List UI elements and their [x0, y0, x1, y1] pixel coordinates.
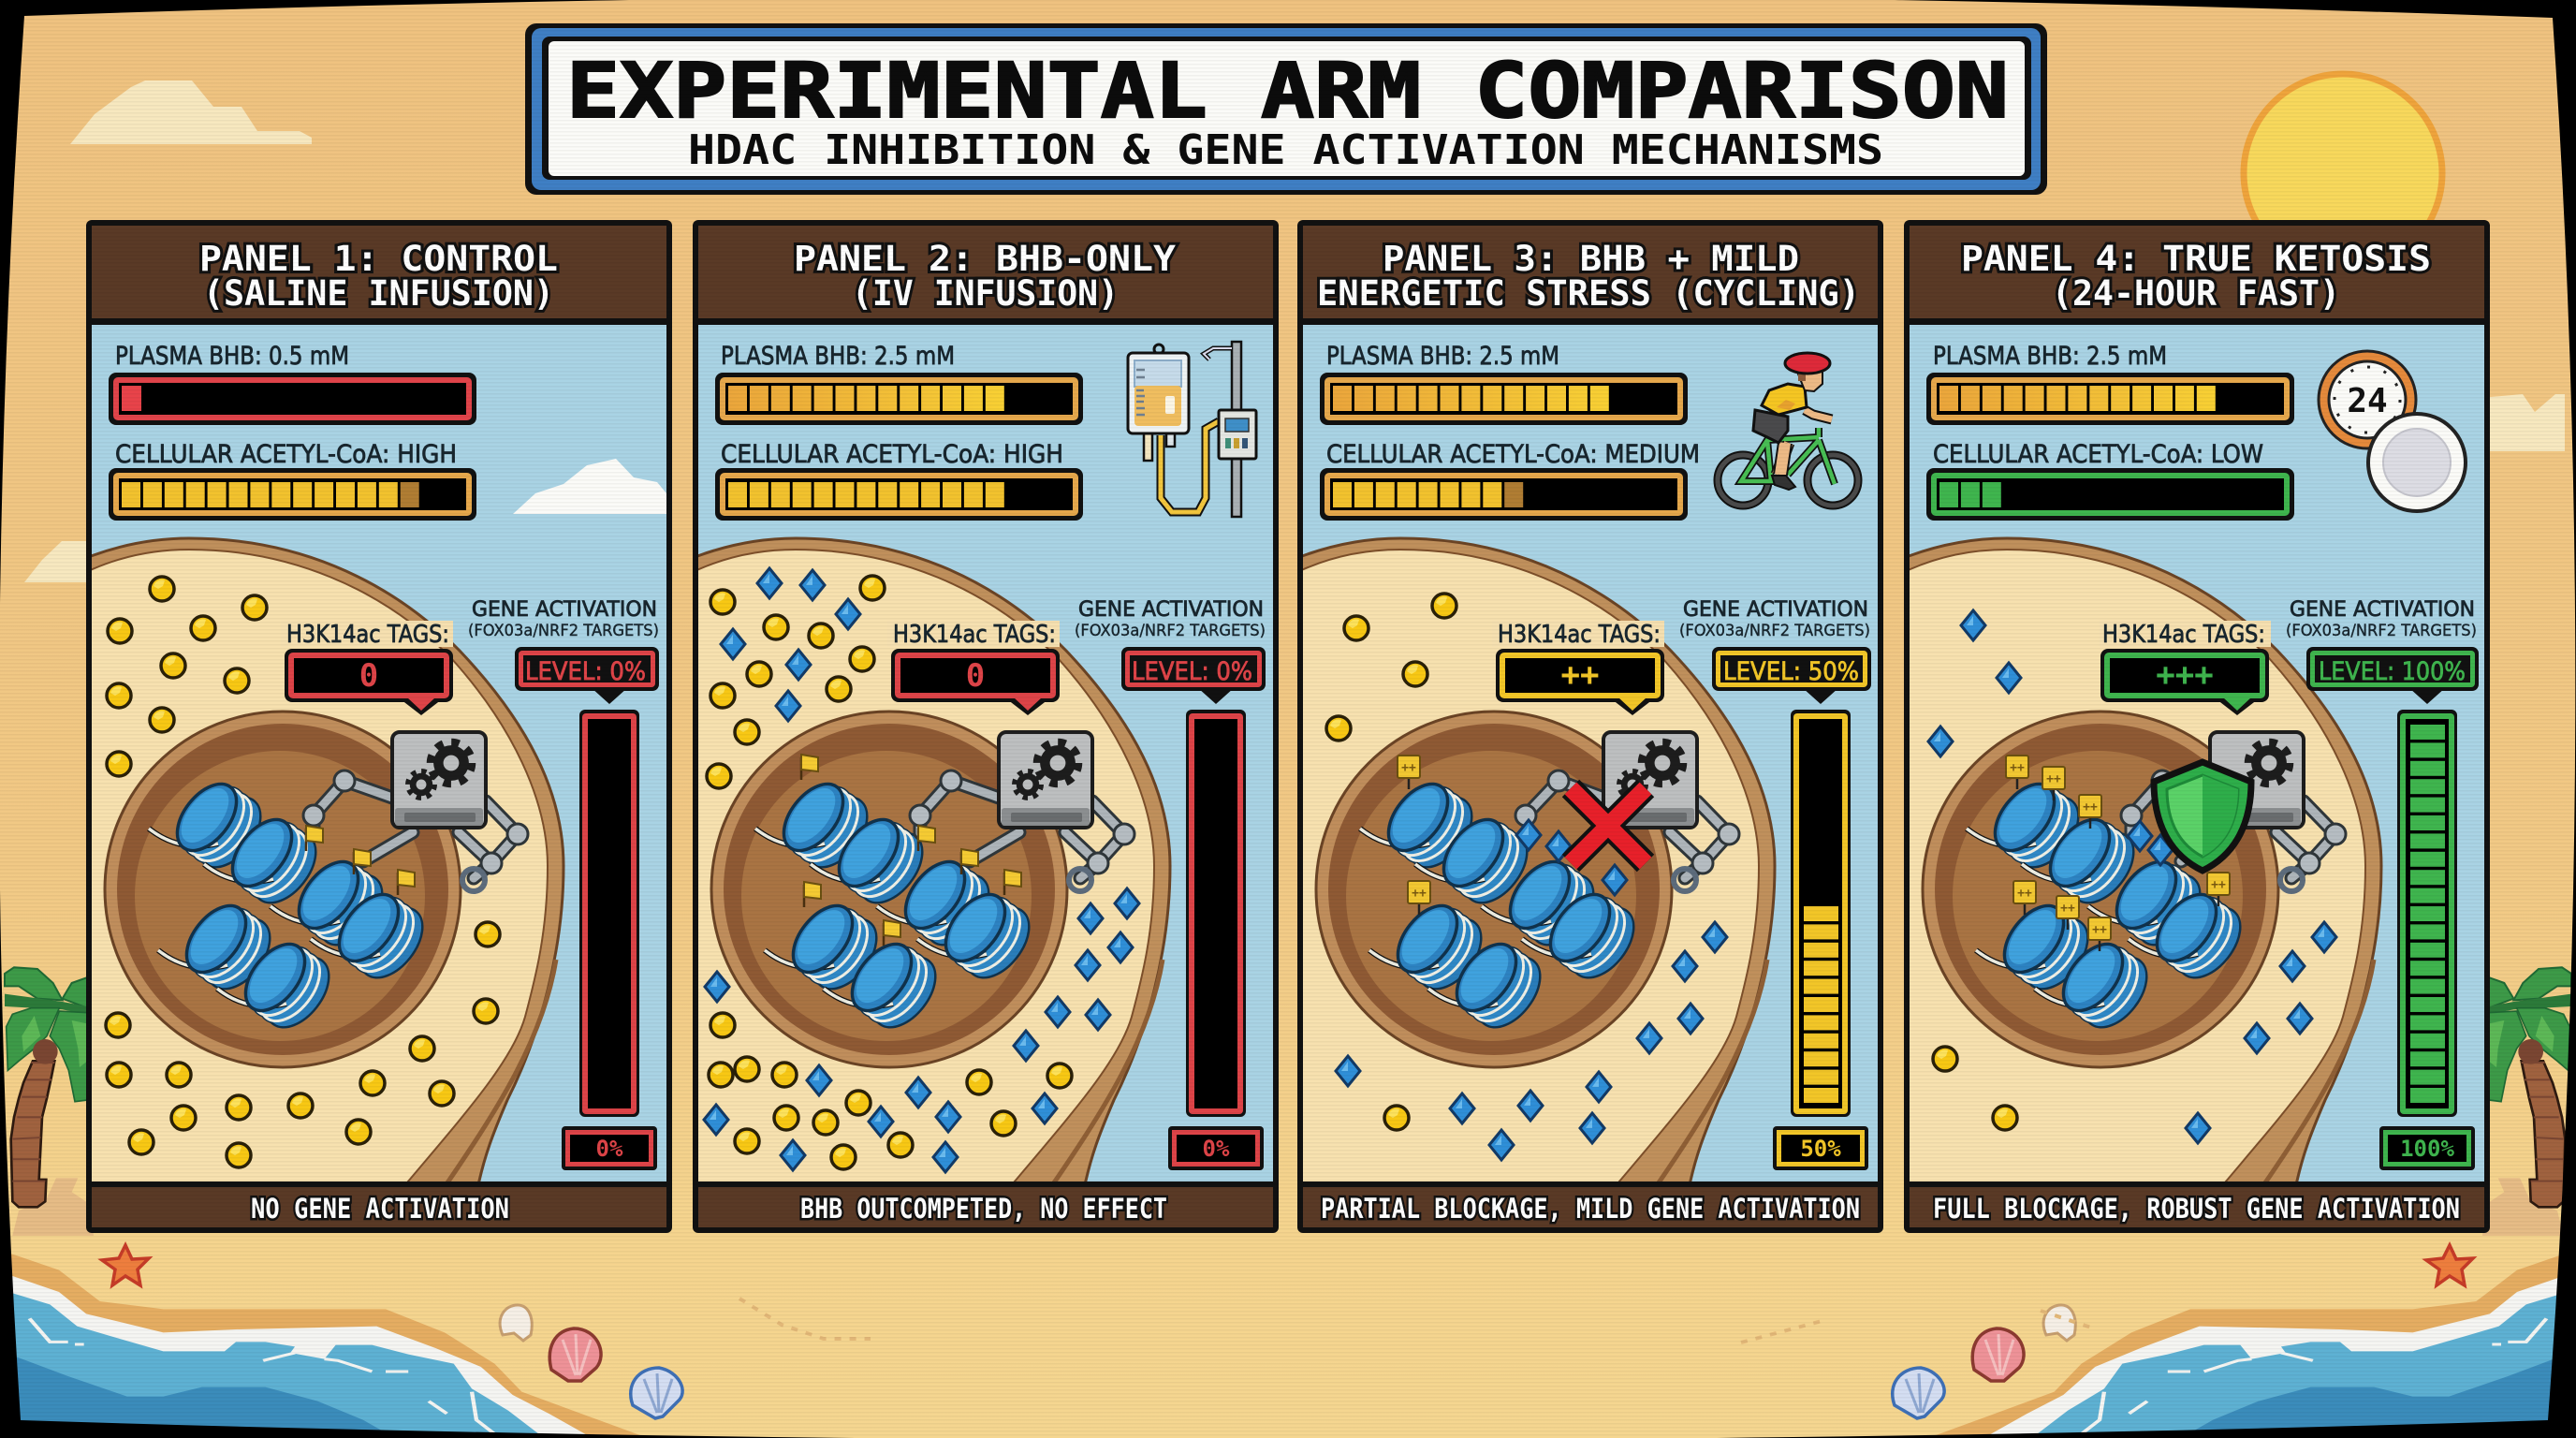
acetyl tags: ++ [2092, 923, 2107, 937]
blue shell left [631, 1368, 682, 1418]
cloud left behind panel [24, 541, 89, 582]
sun [2244, 74, 2442, 272]
HDAC enzyme [303, 732, 528, 891]
panel 2 heading: PANEL 2: BHB-ONLY [794, 239, 1177, 279]
cell with nucleus [77, 538, 564, 1194]
panel 3: BHB + mild energetic stress [1288, 220, 1883, 1233]
H3K14ac readout [891, 621, 1060, 715]
glucose coins [106, 577, 500, 1167]
coins [1326, 594, 1456, 1130]
gene activation meter: GENE ACTIVATION [1683, 598, 1868, 622]
H3K14ac readout [1496, 621, 1664, 715]
title: EXPERIMENTAL ARM COMPARISON [566, 48, 2009, 136]
acetyl tags [1398, 756, 1430, 915]
shoreline left [0, 1245, 658, 1438]
acetyl-CoA label: CELLULAR ACETYL-CoA: LOW [1933, 440, 2263, 469]
panel 4: true ketosis [1895, 220, 2490, 1233]
acetyl-CoA bar [1320, 468, 1688, 521]
acetyl tags [2006, 756, 2230, 951]
cell with nucleus [683, 538, 1170, 1194]
plasma BHB bar [1926, 373, 2294, 425]
BHB diamonds [1336, 922, 1727, 1160]
plasma BHB bar [109, 373, 476, 425]
gene activation meter: GENE ACTIVATION [1078, 598, 1264, 622]
plasma BHB label: PLASMA BHB: 2.5 mM [721, 342, 955, 371]
acetyl tags: ++ [2211, 878, 2226, 892]
plasma BHB label: PLASMA BHB: 2.5 mM [1933, 342, 2167, 371]
gene activation meter [2286, 598, 2479, 1170]
chromatin nucleosomes [1967, 773, 2250, 1036]
palm tree right [2482, 967, 2571, 1236]
acetyl tags: ++ [1401, 761, 1416, 775]
panel 1 heading: PANEL 1: CONTROL [199, 239, 558, 279]
H3K14ac readout: +++ [2156, 656, 2214, 694]
H3K14ac readout: 0 [966, 657, 985, 695]
panel 1 heading [199, 239, 558, 314]
title banner [525, 23, 2047, 195]
gene activation meter: LEVEL: 0% [1132, 657, 1252, 686]
chromatin nucleosomes [755, 773, 1039, 1036]
BHB at enzyme [2128, 821, 2173, 865]
acetyl tags: ++ [1412, 887, 1427, 901]
panel 4 conclusion: FULL BLOCKAGE, ROBUST GENE ACTIVATION [1933, 1193, 2460, 1225]
icon: IV bag and pole [1128, 342, 1256, 517]
BHB diamonds [1928, 610, 2336, 1143]
panel 4 heading: (24-HOUR FAST) [2052, 273, 2340, 314]
pink shell right [1972, 1328, 2024, 1381]
icon: 24-hour clock [2319, 351, 2416, 448]
acetyl tags: ++ [2017, 887, 2032, 901]
panel 4 heading: PANEL 4: TRUE KETOSIS [1961, 239, 2431, 279]
gene activation meter: GENE ACTIVATION [472, 598, 657, 622]
gene activation meter: (FOX03a/NRF2 TARGETS) [1679, 622, 1870, 640]
acetyl tags: ++ [2046, 772, 2061, 786]
H3K14ac readout: ++ [1561, 656, 1599, 694]
gene activation meter: LEVEL: 0% [525, 657, 646, 686]
icon: red X block [1571, 788, 1646, 863]
gene activation meter: 0% [1203, 1136, 1230, 1162]
blue shell right [1893, 1368, 1944, 1418]
BHB at enzyme [1516, 820, 1627, 895]
cloud top left [70, 81, 312, 144]
chromatin nucleosomes [149, 773, 432, 1036]
white shell left [500, 1305, 532, 1341]
plasma BHB label: PLASMA BHB: 2.5 mM [1326, 342, 1559, 371]
subtitle: HDAC INHIBITION & GENE ACTIVATION MECHANISMS [688, 126, 1883, 174]
HDAC enzyme [1515, 732, 1739, 891]
gene activation meter: LEVEL: 100% [2319, 657, 2466, 686]
acetyl-CoA label: CELLULAR ACETYL-CoA: MEDIUM [1326, 440, 1700, 469]
acetyl-CoA label: CELLULAR ACETYL-CoA: HIGH [721, 440, 1063, 469]
acetyl tags: ++ [2010, 761, 2025, 775]
gene activation meter [1075, 598, 1266, 1170]
gene activation meter [1679, 598, 1871, 1170]
cell with nucleus [1288, 538, 1775, 1194]
palm tree left [5, 967, 94, 1236]
chromatin nucleosomes [1360, 773, 1644, 1036]
acetyl tags: ++ [2060, 902, 2075, 916]
acetyl tags: ++ [2083, 800, 2098, 814]
panel 3 conclusion: PARTIAL BLOCKAGE, MILD GENE ACTIVATION [1321, 1193, 1860, 1225]
cloud in sky [513, 459, 666, 514]
acetyl-CoA bar [109, 468, 476, 521]
panel 2 heading: (IV INFUSION) [852, 273, 1119, 314]
panel 3 heading: PANEL 3: BHB + MILD [1383, 239, 1799, 279]
sand footprints [739, 1299, 2097, 1343]
plasma BHB label: PLASMA BHB: 0.5 mM [115, 342, 349, 371]
acetyl flags [801, 755, 1021, 946]
icon: empty plate [2368, 414, 2466, 511]
BHB diamonds [704, 568, 1139, 1172]
pink shell left [549, 1328, 601, 1381]
plasma BHB bar [1320, 373, 1688, 425]
gene activation meter: 100% [2400, 1136, 2454, 1162]
gene activation meter: 50% [1800, 1136, 1841, 1162]
shoreline right [1918, 1245, 2576, 1438]
plasma BHB bar [715, 373, 1083, 425]
panel 2 heading [794, 239, 1177, 314]
acetyl-CoA label: CELLULAR ACETYL-CoA: HIGH [115, 440, 457, 469]
panel 3 heading: ENERGETIC STRESS (CYCLING) [1317, 273, 1860, 314]
white shell right [2043, 1305, 2075, 1341]
panel 2 conclusion: BHB OUTCOMPETED, NO EFFECT [800, 1193, 1167, 1225]
panel 1: control [77, 220, 672, 1233]
panel 1 heading: (SALINE INFUSION) [203, 273, 554, 314]
gene activation meter: (FOX03a/NRF2 TARGETS) [468, 622, 659, 640]
H3K14ac readout: H3K14ac TAGS: [2102, 621, 2265, 649]
panel 1 conclusion: NO GENE ACTIVATION [251, 1193, 509, 1225]
coins [707, 576, 1072, 1169]
H3K14ac readout: H3K14ac TAGS: [1498, 621, 1661, 649]
gene activation meter: (FOX03a/NRF2 TARGETS) [1075, 622, 1266, 640]
acetyl-CoA bar [715, 468, 1083, 521]
cloud right behind panel [2481, 394, 2565, 451]
cell with nucleus [1895, 538, 2381, 1194]
gene activation meter: LEVEL: 50% [1723, 657, 1859, 686]
icon: green shield [2154, 762, 2251, 871]
H3K14ac readout: 0 [359, 657, 378, 695]
H3K14ac readout [285, 621, 453, 715]
icon: 24-hour clock: 24 [2347, 382, 2388, 420]
HDAC enzyme [910, 732, 1134, 891]
starfish right [2426, 1245, 2473, 1285]
icon: cyclist [1718, 353, 1858, 506]
gene activation meter [468, 598, 659, 1170]
panel 3 heading [1317, 239, 1860, 314]
panel 4 heading [1961, 239, 2431, 314]
H3K14ac readout [2100, 621, 2269, 715]
acetyl-CoA bar [1926, 468, 2294, 521]
starfish left [102, 1245, 149, 1285]
coins [1933, 1047, 2017, 1130]
panel 2: BHB-only [683, 220, 1279, 1233]
gene activation meter: 0% [596, 1136, 623, 1162]
gene activation meter: GENE ACTIVATION [2290, 598, 2475, 622]
HDAC enzyme [2121, 732, 2346, 891]
H3K14ac readout: H3K14ac TAGS: [893, 621, 1056, 649]
H3K14ac readout: H3K14ac TAGS: [286, 621, 449, 649]
acetyl flags [306, 826, 415, 895]
gene activation meter: (FOX03a/NRF2 TARGETS) [2286, 622, 2477, 640]
